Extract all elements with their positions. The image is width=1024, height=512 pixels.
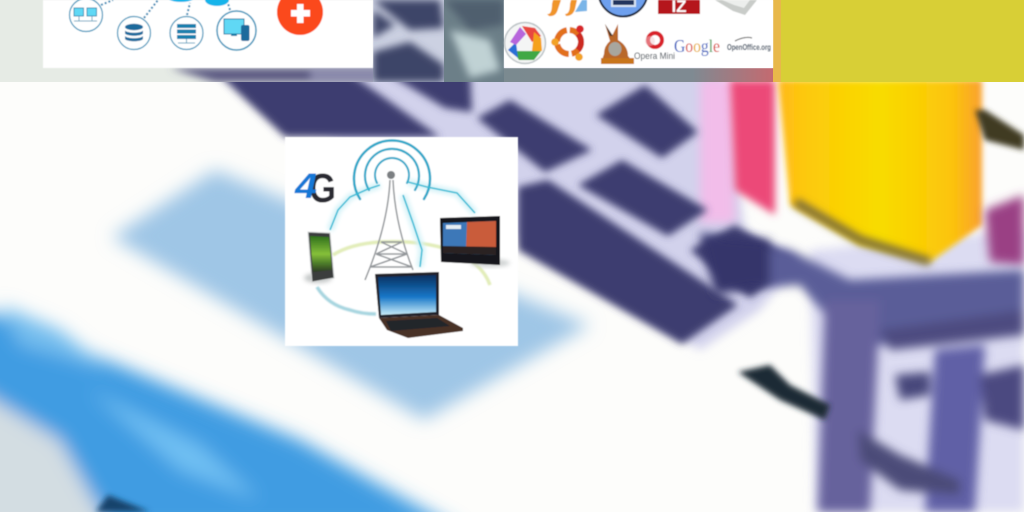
phone	[304, 232, 334, 283]
dark corner bottom left	[96, 495, 150, 512]
lower right purple keys	[700, 232, 1024, 512]
4G badge: G	[309, 165, 336, 211]
signal bolt glow	[330, 182, 475, 267]
panel: software logos image	[504, 0, 773, 68]
icon: Google logo: Google	[674, 36, 720, 56]
4G badge: 4	[294, 167, 317, 206]
icon: Opera Mini logo: Opera Mini	[634, 51, 675, 62]
tablet	[440, 216, 510, 267]
lavender halo behind keys	[205, 60, 1024, 512]
icon: Opera Mini logo	[634, 33, 675, 62]
icon: orange plus button	[277, 0, 323, 35]
translucent top strip	[0, 0, 1024, 84]
icon: desktop computer	[217, 11, 256, 50]
icon: red 7z-style stamp	[658, 0, 700, 16]
icon: grey document	[715, 0, 757, 15]
icon: OpenOffice logo	[727, 37, 771, 52]
signal bolts	[330, 182, 475, 267]
4G badge	[294, 165, 336, 211]
purple keyboard keys	[212, 68, 795, 344]
icon: database	[118, 16, 150, 50]
cell tower	[365, 171, 413, 280]
icon: Picasa pinwheel	[504, 22, 546, 64]
signal arcs	[354, 141, 430, 199]
icon: eMule mascot	[601, 24, 634, 64]
panel: network diagram image	[43, 0, 373, 68]
icon: computers	[70, 0, 102, 32]
icon: Ubuntu logo	[551, 25, 584, 61]
icon: music notes logo	[547, 0, 587, 16]
laptop	[375, 272, 463, 338]
connector lines	[101, 0, 230, 18]
icon: server rack	[170, 16, 203, 50]
green and blue coverage ring	[317, 242, 490, 314]
icon: cloud fragments	[167, 0, 229, 6]
icon: OpenOffice logo: OpenOffice.org	[727, 42, 771, 52]
panel: 4G tower image	[285, 137, 518, 346]
dark key near bottom right	[738, 365, 830, 420]
pink and yellow keys	[700, 78, 1024, 265]
icon: blue round logo	[598, 0, 648, 16]
